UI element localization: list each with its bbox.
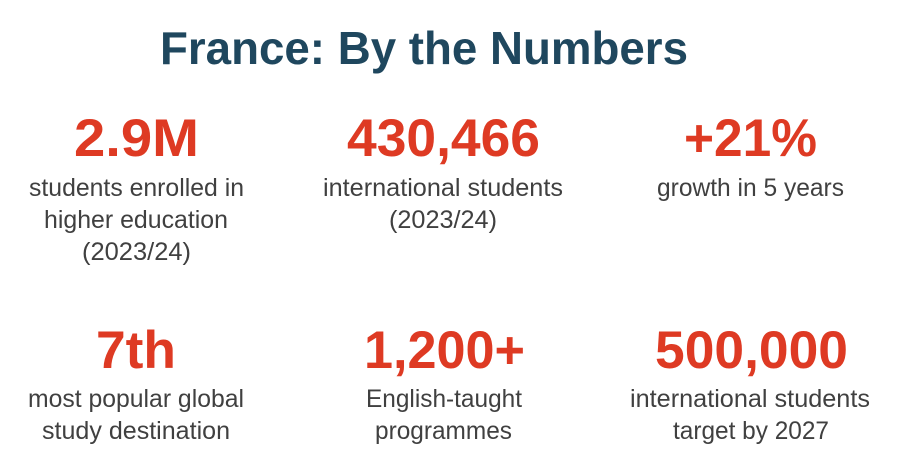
stat description: students enrolled: higher education [44, 206, 228, 234]
stat description: most popular destination: study destination [42, 417, 230, 445]
stat number: 500,000: 500,000 [655, 321, 848, 380]
stat description: target by 2027: target by 2027 [673, 417, 829, 445]
stat description: growth: growth in 5 years [657, 174, 844, 202]
stat number: 2.9M: 2.9M [74, 109, 199, 168]
stat description: students enrolled: (2023/24) [82, 238, 191, 266]
panel: 1,200+ programmes [364, 321, 525, 445]
title: France: By the Numbers [160, 22, 688, 74]
stat description: international students [323, 174, 563, 234]
panel: +21% growth [657, 109, 844, 202]
stat description: students enrolled: students enrolled in [29, 174, 244, 202]
stat description: target by 2027: international students [630, 385, 870, 413]
stat description: English-taught programmes: programmes [375, 417, 512, 445]
panel: 430,466 international students [323, 109, 563, 234]
stat description: international students: international students [323, 174, 563, 202]
stat description: most popular destination: most popular global [28, 385, 244, 413]
stat description: English-taught programmes: English-taught [366, 385, 522, 413]
stat description: English-taught programmes [366, 385, 522, 445]
panel: 500,000 target [630, 321, 870, 445]
panel: 7th most popular [28, 321, 244, 445]
stat description: most popular destination [28, 385, 244, 445]
stat description: students enrolled [29, 174, 244, 266]
stat number: 430,466: 430,466 [347, 109, 540, 168]
stat number: 1,200+: 1,200+ [364, 321, 525, 380]
stat description: international students: (2023/24) [389, 206, 497, 234]
stat number: 7th: 7th [96, 321, 176, 380]
stat number: +21%: +21% [684, 109, 817, 168]
panel: 2.9M students enrolled [29, 109, 244, 266]
stat description: target by 2027 [630, 385, 870, 445]
